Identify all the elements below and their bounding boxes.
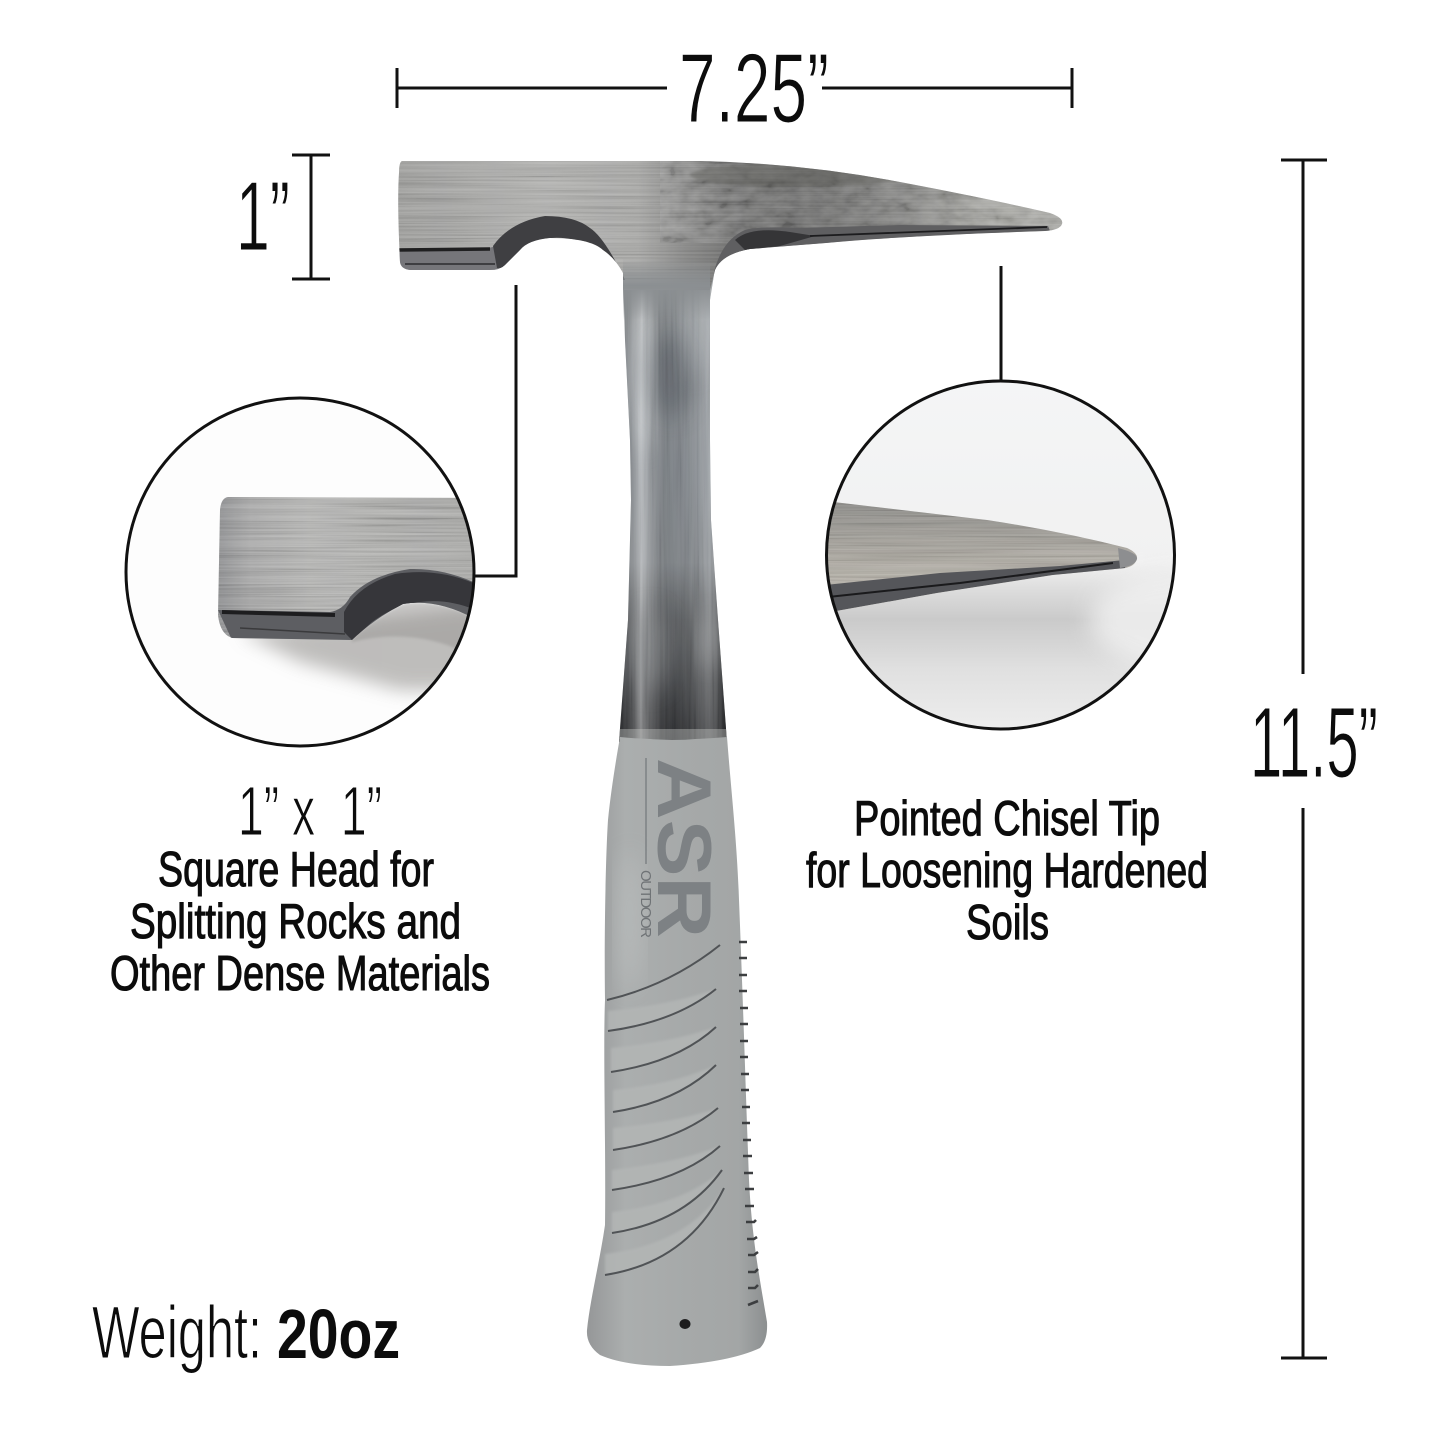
chamfered neck cut (493, 216, 625, 280)
total height dimension 11.5 in (1250, 160, 1378, 1358)
logo on grip: ASR (641, 758, 726, 938)
callout circle: chisel tip (825, 380, 1176, 730)
text: chisel tip description: for Loosening Hardened (806, 844, 1208, 898)
weight label: Weight: (92, 1291, 262, 1374)
text: chisel tip description: Pointed Chisel Tip (854, 792, 1160, 846)
label: 1 in x 1 in: 1” x 1” (238, 772, 382, 850)
text: chisel tip description (806, 792, 1208, 950)
text: chisel tip description: Soils (966, 896, 1049, 950)
hammer (395, 158, 1065, 1366)
grip side notches (739, 942, 758, 1305)
text: square head description: Other Dense Materials (110, 947, 490, 1001)
grip ribs (605, 945, 724, 1275)
neck blend between head and shank (623, 258, 710, 320)
leader line to chisel tip callout (1000, 266, 1002, 381)
callout circle: square head (120, 395, 480, 750)
width dimension 7.25 in: 7.25” (679, 33, 829, 143)
grip hole (680, 1319, 690, 1329)
text: square head description (110, 843, 490, 1001)
logo on grip: OUTDOOR (637, 870, 654, 938)
bevel at square head (399, 247, 505, 270)
hammer head (395, 158, 1065, 293)
text: square head description: Splitting Rocks and (130, 895, 461, 949)
grip highlight (620, 850, 640, 990)
text: square head description: Square Head for (158, 843, 434, 897)
hammer handle metal shank (615, 262, 730, 745)
head height dimension 1 in: 1” (236, 161, 290, 271)
chamfer under pick (714, 225, 1050, 274)
weight label: 20oz (277, 1295, 400, 1373)
width dimension 7.25 in (397, 33, 1072, 143)
leader line to square head callout (475, 285, 516, 576)
rubber grip (587, 737, 767, 1366)
